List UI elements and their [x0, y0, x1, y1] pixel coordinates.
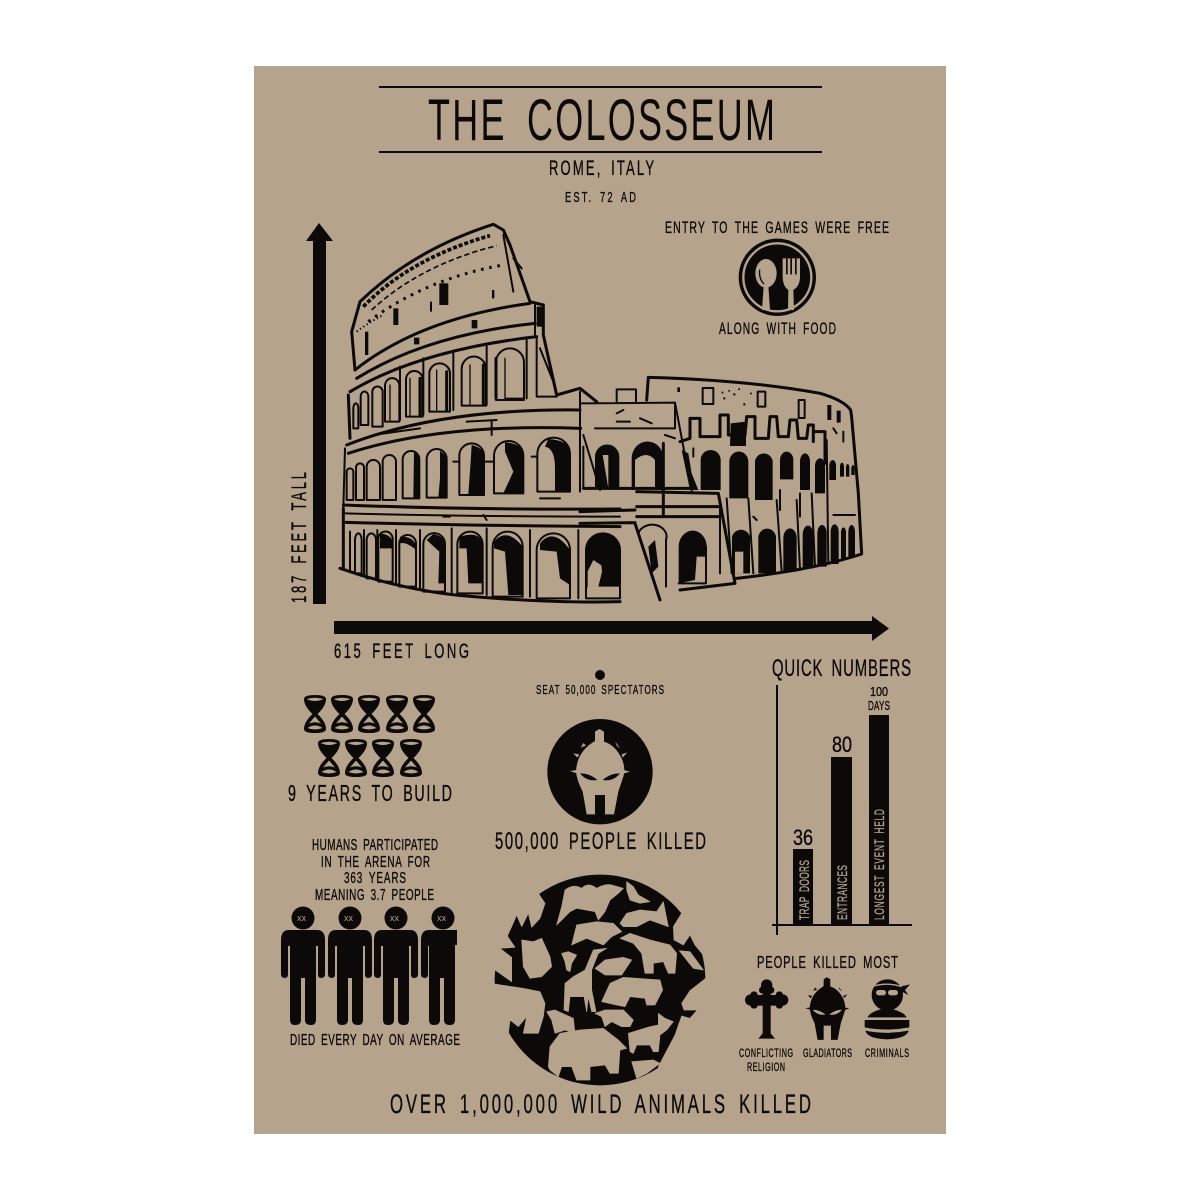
icon: circle of animals: [490, 870, 710, 1090]
label: 187 feet tall: 187 FEET TALL: [287, 472, 311, 603]
icon group: four dead people: [281, 906, 457, 1025]
bar: trap doors: [793, 826, 813, 925]
text: humans participated: MEANING 3.7 PEOPLE: [315, 886, 434, 904]
heading: quick numbers: QUICK NUMBERS: [772, 656, 911, 682]
text: along with food: ALONG WITH FOOD: [719, 320, 836, 338]
right ruined section: [580, 377, 862, 600]
bar: longest event: [868, 684, 890, 925]
text: entry free: ENTRY TO THE GAMES WERE FREE: [665, 217, 889, 237]
text: people killed: 500,000 PEOPLE KILLED: [495, 829, 706, 855]
bar: entrances: [831, 733, 852, 925]
icon group: nine hourglasses: [304, 695, 435, 777]
text: nine years to build: 9 YEARS TO BUILD: [288, 782, 452, 807]
caption: conflicting religion: RELIGION: [747, 1061, 785, 1075]
bar: trap doors: 36: [793, 826, 813, 850]
arrow: length: [334, 616, 889, 641]
icon group: four dead people: xx: [297, 913, 306, 923]
label: 615 feet long: 615 FEET LONG: [334, 639, 469, 663]
bar: longest event: LONGEST EVENT HELD: [873, 809, 888, 920]
bar: entrances: ENTRANCES: [836, 865, 851, 920]
subtitle: rome, italy: ROME, ITALY: [549, 156, 654, 180]
caption: gladiators: GLADIATORS: [803, 1047, 852, 1061]
icon: spoon and fork: [739, 239, 816, 316]
icon: gladiator helmet in circle: [547, 719, 653, 824]
left main section: [340, 224, 620, 602]
heading: people killed most: PEOPLE KILLED MOST: [757, 952, 898, 973]
icon: gladiator helmet: [805, 977, 849, 1040]
icon: dot: [595, 670, 605, 680]
bar: longest event: DAYS: [868, 699, 890, 714]
text: humans participated: IN THE ARENA FOR: [321, 853, 430, 871]
bar chart: quick numbers: [772, 684, 912, 935]
icon group: four dead people: xx: [344, 913, 354, 923]
bar: longest event: 100: [870, 684, 888, 699]
arrow: height: [306, 223, 333, 604]
text: humans participated: [312, 836, 438, 904]
bar: trap doors: TRAP DOORS: [798, 860, 813, 920]
text: humans participated: 363 YEARS: [344, 869, 406, 887]
icon group: four dead people: xx: [437, 913, 446, 923]
text: seat spectators: SEAT 50,000 SPECTATORS: [536, 683, 664, 698]
bar: entrances: 80: [832, 733, 852, 757]
heading: the colosseum: THE COLOSSEUM: [428, 88, 775, 153]
caption: criminals: CRIMINALS: [865, 1047, 909, 1061]
icon: criminal: [865, 979, 910, 1039]
text: wild animals killed: OVER 1,000,000 WILD ANIMALS KILLED: [390, 1089, 811, 1119]
illustration: colosseum: [340, 224, 862, 602]
text: established date: EST. 72 AD: [565, 189, 636, 206]
caption: conflicting religion: CONFLICTING: [739, 1047, 793, 1061]
text: humans participated: HUMANS PARTICIPATED: [312, 836, 438, 854]
caption: conflicting religion: [739, 1047, 793, 1075]
animal silhouettes and edge cut-outs: [490, 870, 710, 1090]
text: died every day: DIED EVERY DAY ON AVERAGE: [290, 1031, 460, 1049]
icon group: four dead people: xx: [390, 913, 400, 923]
icon: cross: [745, 979, 788, 1039]
panel: poster background: [254, 66, 946, 1134]
